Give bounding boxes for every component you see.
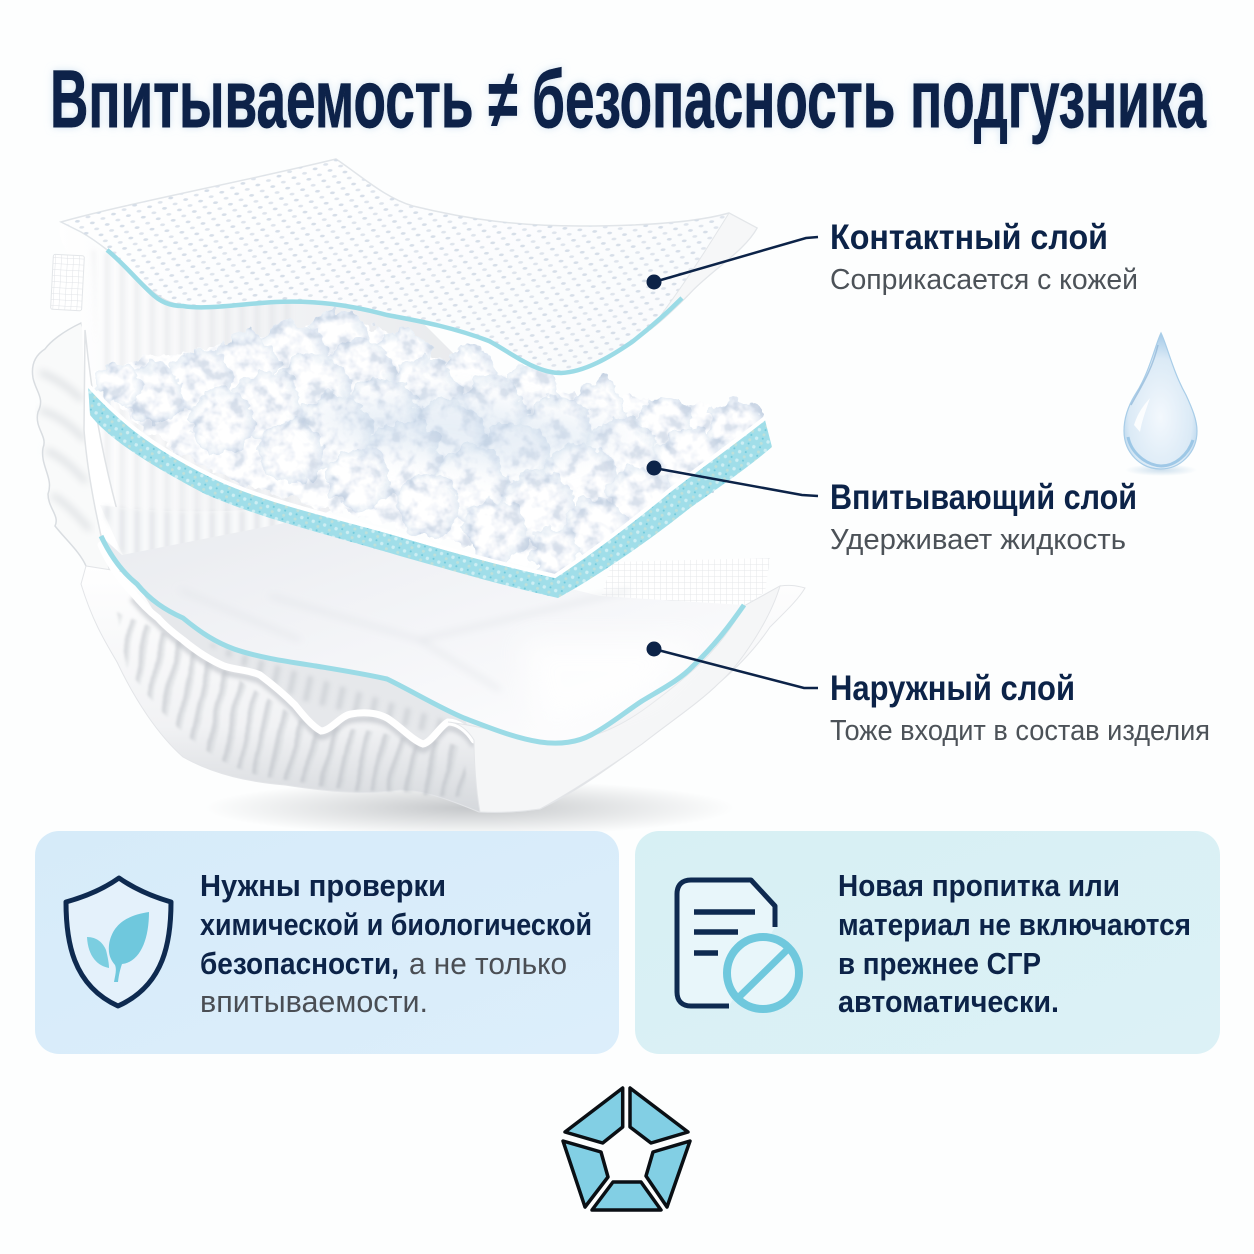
front flap [448, 586, 780, 812]
registration text: автоматически. [838, 984, 1059, 1019]
safety text: а не только [409, 946, 567, 981]
label: contact layer: Контактный слой [830, 218, 1108, 257]
right back tab [600, 558, 770, 606]
ground shadow [205, 780, 735, 836]
registration text: Новая пропитка или [838, 868, 1120, 903]
panel: registration notice [635, 831, 1220, 1054]
label: contact layer: Соприкасается с кожей [830, 264, 1138, 296]
icon: document with prohibition sign [677, 880, 799, 1009]
label: absorbent layer: Впитывающий слой [830, 478, 1137, 517]
panel: safety checks [35, 831, 619, 1054]
label: absorbent layer: Удерживает жидкость [830, 524, 1126, 556]
top sheet fold [650, 213, 757, 330]
safety text: Нужны проверки [200, 868, 446, 903]
top contact sheet [50, 150, 770, 380]
left waistband strip [84, 330, 135, 600]
label: outer layer: Наружный слой [830, 669, 1075, 708]
rear pleated band [100, 505, 330, 560]
wavy front edge [101, 545, 474, 744]
absorbent core [88, 310, 772, 598]
outer bowl [81, 566, 805, 812]
label: contact layer [830, 218, 1138, 296]
sheet blue edge [101, 536, 744, 743]
wavy front edge shadow [132, 598, 474, 750]
top sheet blue edge [107, 250, 682, 373]
inner gathered interior [137, 584, 474, 744]
registration text: в прежнее СГР [838, 946, 1041, 981]
back wall with pleats [60, 222, 520, 540]
core white seam [88, 385, 765, 576]
left tab [51, 254, 84, 311]
illustration: layered diaper [32, 150, 818, 836]
safety text: безопасности, [200, 946, 399, 981]
core side band [88, 385, 772, 598]
registration text [838, 868, 1191, 1019]
ruffle folds [40, 372, 90, 530]
safety text: впитываемости. [200, 984, 428, 1019]
icon: shield with leaf [66, 878, 171, 1006]
label: absorbent layer [830, 478, 1137, 556]
label: outer layer [830, 669, 1210, 747]
left ruffle [32, 323, 130, 600]
safety text [200, 868, 592, 1019]
leader lines [646, 237, 818, 688]
logo: pentagon [563, 1088, 690, 1210]
core fluffy top [96, 310, 761, 577]
bottom plastic sheet [101, 521, 744, 743]
registration text: материал не включаются [838, 907, 1191, 942]
icon: water drop [1124, 333, 1197, 476]
safety text: химической и биологической [200, 907, 592, 942]
label: outer layer: Тоже входит в состав изделия [830, 715, 1210, 747]
